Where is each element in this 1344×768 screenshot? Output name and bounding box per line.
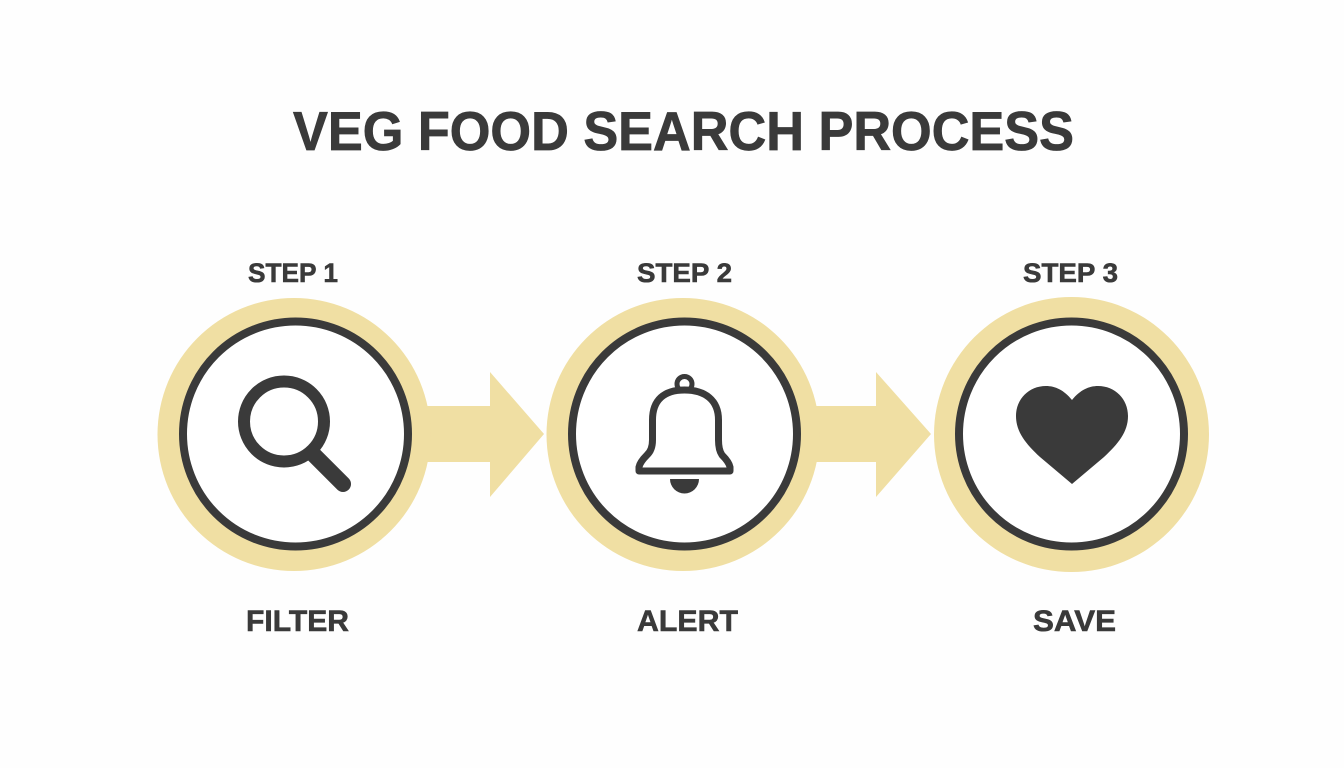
step 2 inner ring: [572, 322, 797, 546]
step 1 outer circle: [158, 298, 430, 571]
step 3: save: [934, 258, 1209, 638]
arrow: step 2 to step 3: [805, 372, 931, 497]
step 3 caption: SAVE: [1033, 605, 1116, 638]
icon: bell: [639, 376, 730, 493]
step 1 inner ring: [183, 322, 408, 546]
step 1 caption: FILTER: [246, 605, 349, 638]
step 1 label: STEP 1: [248, 258, 338, 288]
step 2 caption: ALERT: [637, 605, 738, 638]
step 1: filter: [158, 258, 430, 638]
step 2 outer circle: [546, 298, 820, 571]
step 3 inner ring: [959, 322, 1184, 546]
icon: magnifying glass: [244, 382, 343, 484]
step 3 outer circle: [934, 297, 1209, 572]
step 3 label: STEP 3: [1023, 258, 1118, 288]
icon: heart: [1016, 386, 1128, 484]
arrow: step 1 to step 2: [415, 372, 544, 497]
step 2 label: STEP 2: [637, 258, 732, 288]
title: VEG FOOD SEARCH PROCESS: [293, 101, 1074, 162]
step 2: alert: [546, 258, 820, 638]
